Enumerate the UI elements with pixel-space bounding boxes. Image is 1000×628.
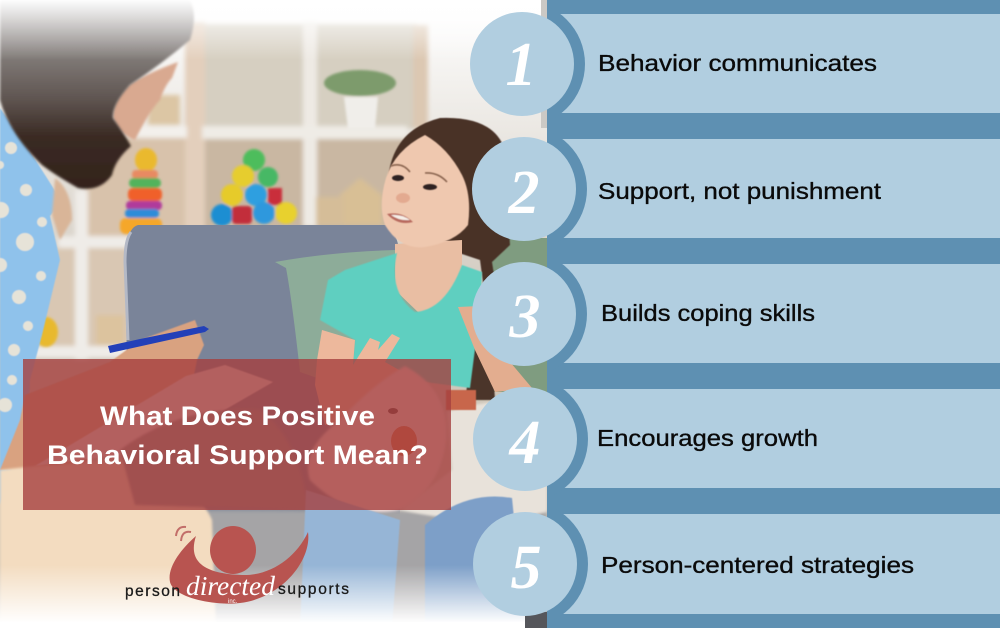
ring bbox=[462, 501, 588, 627]
wall background bbox=[0, 47, 547, 612]
number circle bbox=[473, 512, 577, 616]
sofa edge highlight bbox=[125, 232, 131, 340]
ring bbox=[547, 14, 585, 113]
girl face bbox=[382, 135, 469, 247]
white fade: top of photo bbox=[0, 0, 541, 60]
logo word: person: person bbox=[125, 583, 180, 600]
band bbox=[547, 14, 1000, 113]
sofa seat bbox=[207, 510, 547, 612]
therapist face bbox=[113, 62, 178, 140]
therapist arm and hand bbox=[0, 320, 204, 470]
label: Person-centered strategies bbox=[601, 552, 914, 578]
sofa bbox=[125, 225, 400, 530]
bottom dark floor corner bbox=[525, 612, 547, 628]
yellow toy on lower shelf bbox=[34, 317, 58, 347]
band bbox=[547, 514, 1000, 614]
label: Behavior communicates bbox=[598, 50, 877, 76]
number: 5 bbox=[510, 534, 542, 602]
therapist trousers bbox=[0, 460, 216, 628]
logo: person directed supports bbox=[125, 526, 349, 605]
number: 2 bbox=[508, 159, 540, 227]
blue pen bbox=[108, 326, 209, 353]
ring bbox=[547, 389, 588, 488]
white fade: bottom of photo bbox=[0, 565, 525, 623]
toy blocks bbox=[211, 149, 297, 226]
number circle bbox=[472, 262, 576, 366]
logo head bbox=[210, 526, 256, 574]
title text bbox=[47, 401, 428, 470]
title panel bbox=[23, 359, 451, 510]
item 5: Person-centered strategies bbox=[462, 501, 1000, 627]
item 3: Builds coping skills bbox=[472, 262, 1000, 366]
therapist blouse bbox=[0, 108, 62, 505]
item 1: Behavior communicates bbox=[470, 12, 1000, 116]
item 4: Encourages growth bbox=[473, 387, 1000, 491]
girl hair back and braid bbox=[388, 118, 510, 400]
clipboard bbox=[35, 365, 273, 466]
band bbox=[547, 389, 1000, 488]
ring bbox=[547, 139, 587, 238]
number circle bbox=[473, 387, 577, 491]
logo word: directed: directed bbox=[186, 571, 275, 601]
girl teal shirt bbox=[320, 253, 482, 388]
label: Encourages growth bbox=[597, 425, 818, 451]
white footer edge bbox=[0, 622, 525, 628]
band bbox=[547, 264, 1000, 363]
girl neck bbox=[395, 240, 462, 314]
number circle bbox=[472, 137, 576, 241]
green cushion behind child bbox=[490, 238, 547, 392]
girl facial features bbox=[387, 165, 447, 223]
green cushion bbox=[275, 250, 418, 359]
white plush body bbox=[400, 401, 547, 520]
grey pillow bbox=[120, 410, 222, 507]
grey strip bbox=[541, 0, 547, 128]
number: 4 bbox=[508, 409, 540, 477]
potted plant bbox=[324, 70, 396, 129]
red translucent box bbox=[23, 359, 451, 510]
girl left arm bbox=[315, 330, 408, 425]
ring bbox=[547, 264, 587, 363]
number: 3 bbox=[508, 283, 540, 351]
jeans bbox=[301, 490, 514, 613]
logo word: supports: supports bbox=[278, 581, 349, 598]
logo word: inc: inc. bbox=[228, 599, 238, 605]
label: Builds coping skills bbox=[601, 300, 815, 326]
therapist neck shadow bbox=[52, 178, 72, 240]
title text: Behavioral Support Mean? bbox=[47, 440, 428, 470]
number: 1 bbox=[506, 31, 536, 99]
photo: therapist and child on a sofa bbox=[0, 0, 547, 628]
number circle bbox=[470, 12, 574, 116]
girl right hand bbox=[458, 306, 532, 392]
therapist hair bbox=[0, 0, 194, 189]
wooden shelving unit bbox=[30, 22, 428, 360]
logo swoosh bbox=[170, 532, 308, 604]
label: Support, not punishment bbox=[598, 178, 882, 204]
list panel background bbox=[547, 0, 1000, 628]
teddy bear plush bbox=[308, 366, 476, 512]
band bbox=[547, 139, 1000, 238]
item 2: Support, not punishment bbox=[472, 137, 1000, 241]
ring stacker toy bbox=[120, 148, 162, 234]
title text: What Does Positive bbox=[100, 401, 375, 431]
logo motion marks bbox=[176, 527, 191, 541]
